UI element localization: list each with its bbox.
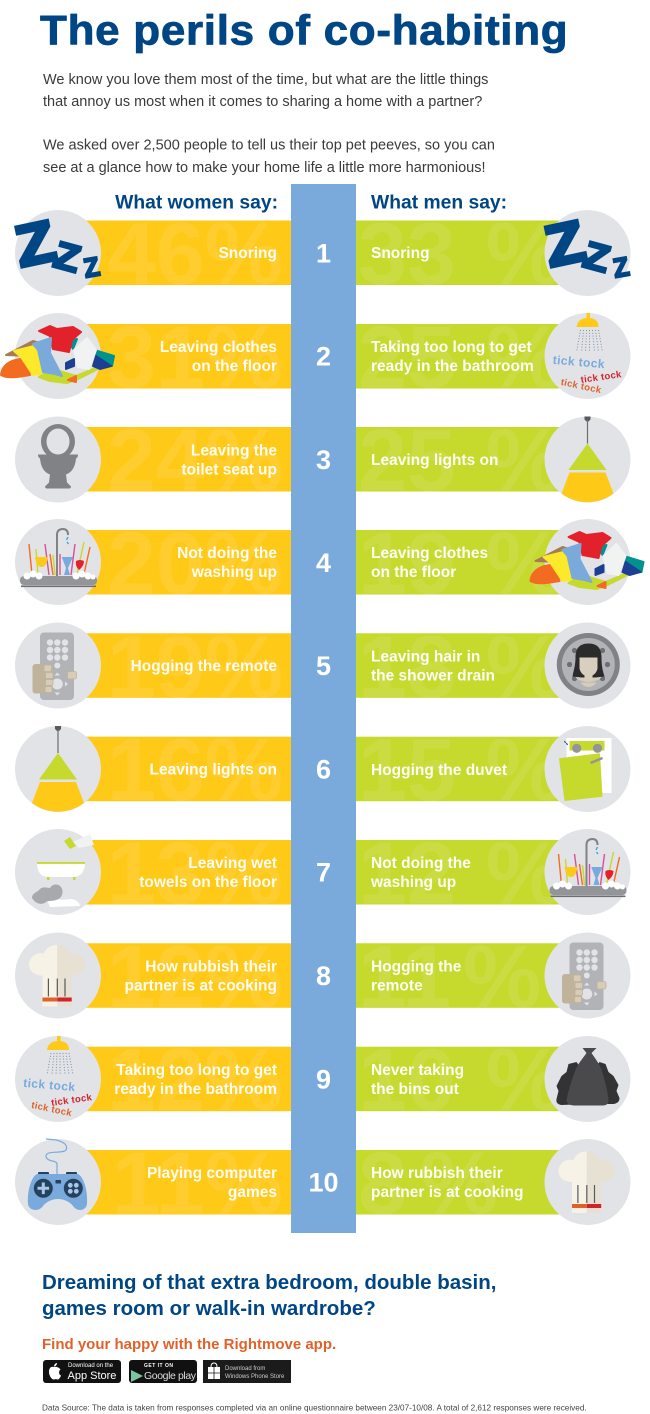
row 9 women: taking too long 12%: ready in the bathroom bbox=[114, 1081, 277, 1098]
heading: what women say: What women say: bbox=[115, 192, 278, 214]
row 10 women: computer games 11%: Playing computer bbox=[147, 1165, 277, 1182]
title: The perils of co-habiting bbox=[40, 8, 568, 54]
icon: shower and tick tock, men: tick tock bbox=[552, 353, 606, 371]
icon: pendant lamp, women bbox=[15, 726, 101, 812]
row 2 women: leaving clothes 31%: on the floor bbox=[192, 358, 277, 375]
central ranking column: 4 bbox=[316, 548, 331, 578]
central ranking column: 1 bbox=[316, 238, 331, 268]
badge: google play: GET IT ON bbox=[144, 1363, 174, 1369]
icon: bin bags, men bbox=[544, 1036, 630, 1122]
icon: sleeping zzz, women: Z bbox=[9, 208, 61, 279]
central ranking column: 7 bbox=[316, 858, 331, 888]
row 8 women: rubbish cooking 12%: partner is at cooking bbox=[125, 978, 277, 994]
central ranking column: 2 bbox=[316, 342, 331, 372]
row 2 men: taking too long 25%: 25 % bbox=[358, 308, 564, 406]
badge: windows phone store: Windows Phone Store bbox=[225, 1374, 285, 1380]
icon: remote, men bbox=[544, 932, 630, 1018]
row 9 men: never taking bins out 10%: Never taking bbox=[371, 1062, 464, 1079]
icon: chef hat, women bbox=[15, 932, 101, 1018]
row 7 men: washing up 12%: Not doing the bbox=[371, 855, 471, 872]
icon: shower and tick tock, women: tick tock bbox=[30, 1100, 73, 1119]
row 4 men: leaving clothes 19%: on the floor bbox=[371, 564, 456, 581]
row 6 men: hogging the duvet 15%: Hogging the duvet bbox=[371, 762, 507, 779]
central ranking column bbox=[291, 184, 356, 1233]
badge: app store: App Store bbox=[68, 1370, 116, 1382]
row 5 women: hogging the remote 19%: 19% bbox=[107, 617, 283, 716]
row 9 women: taking too long 12%: 12% bbox=[107, 1030, 283, 1129]
icon: sleeping zzz, men: Z bbox=[539, 208, 590, 279]
badge: app store bbox=[43, 1360, 121, 1383]
row 4 women: washing up 20%: Not doing the bbox=[177, 545, 277, 562]
icon: sleeping zzz, women bbox=[9, 208, 102, 296]
row 3 men: leaving lights on 25%: 25 % bbox=[358, 410, 564, 510]
icon: remote, women bbox=[15, 622, 101, 708]
central ranking column: 3 bbox=[316, 445, 331, 475]
intro text: We asked over 2,500 people to tell us their top pet peeves, so you can bbox=[43, 138, 495, 154]
row 3 women: toilet seat 24%: 24% bbox=[107, 410, 283, 510]
row 10 women: computer games 11%: 11% bbox=[112, 1134, 283, 1232]
row 10 men: rubbish cooking 8% bbox=[356, 1134, 561, 1232]
row 2 women: leaving clothes 31%: Leaving clothes bbox=[160, 339, 277, 356]
icon: sleeping zzz, men: Z bbox=[579, 234, 614, 281]
row 4 women: washing up 20%: 20% bbox=[107, 514, 283, 612]
central ranking column: 10 bbox=[308, 1168, 339, 1198]
icon: washing up, men bbox=[544, 829, 630, 915]
icon: shower and tick tock, men bbox=[544, 313, 630, 399]
closing question heading: games room or walk-in wardrobe? bbox=[42, 1297, 376, 1320]
closing question heading: Dreaming of that extra bedroom, double basin, bbox=[42, 1271, 496, 1294]
icon: game controller, women bbox=[15, 1139, 101, 1225]
row 1 women: snoring 46%: Snoring bbox=[218, 245, 277, 262]
row 9 women: taking too long 12%: Taking too long to get bbox=[116, 1062, 277, 1079]
central ranking column: 9 bbox=[316, 1064, 331, 1094]
row 4 women: washing up 20%: washing up bbox=[191, 564, 277, 581]
row 10 men: rubbish cooking 8%: 8% bbox=[358, 1134, 498, 1232]
icon: bath and wet towel, women bbox=[15, 829, 101, 915]
row 7 women: wet towels 13%: Leaving wet bbox=[188, 855, 277, 872]
icon: washing up, women bbox=[15, 519, 101, 605]
row 9 men: never taking bins out 10%: 10 % bbox=[358, 1030, 564, 1129]
row 7 men: washing up 12%: 12 % bbox=[358, 824, 564, 922]
row 2 women: leaving clothes 31%: 31% bbox=[107, 308, 283, 406]
row 1 men: snoring 33%: 33 % bbox=[358, 204, 564, 303]
row 8 women: rubbish cooking 12%: How rubbish their bbox=[145, 958, 277, 976]
icon: pendant lamp, men bbox=[544, 416, 630, 502]
row 5 men: hair in drain 18%: 18 % bbox=[358, 617, 564, 716]
icon: sleeping zzz, men bbox=[539, 208, 632, 296]
row 10 women: computer games 11%: games bbox=[228, 1184, 277, 1201]
row 8 women: rubbish cooking 12%: 12% bbox=[107, 927, 283, 1026]
row 8 men: hogging the remote 11%: Hogging the bbox=[371, 958, 462, 976]
icon: shower and tick tock, women bbox=[15, 1036, 101, 1122]
intro text bbox=[43, 72, 495, 176]
row 3 women: toilet seat 24%: Leaving the bbox=[191, 442, 277, 460]
icon: clothes pile, women bbox=[1, 313, 114, 399]
intro text: We know you love them most of the time, but what are the little things bbox=[43, 72, 488, 88]
row 8 men: hogging the remote 11%: 11% bbox=[358, 927, 541, 1026]
badge: windows phone store bbox=[203, 1360, 291, 1383]
badge: google play: Google play bbox=[144, 1370, 197, 1382]
row 9 men: never taking bins out 10%: the bins out bbox=[371, 1081, 459, 1098]
closing question heading bbox=[42, 1271, 496, 1320]
icon: duvet hog, men bbox=[544, 726, 630, 812]
icon: hair in drain, men bbox=[544, 622, 630, 708]
row 10 men: rubbish cooking 8%: How rubbish their bbox=[371, 1165, 503, 1182]
row 7 women: wet towels 13%: 13% bbox=[107, 824, 283, 922]
row 6 women: leaving lights on 16%: Leaving lights on bbox=[150, 762, 277, 778]
badge: app store: Download on the bbox=[68, 1363, 114, 1369]
icon: sleeping zzz, women: Z bbox=[49, 234, 85, 281]
row 3 men: leaving lights on 25%: Leaving lights on bbox=[371, 452, 498, 469]
row 1 women: snoring 46%: 46% bbox=[107, 204, 283, 303]
row 7 men: washing up 12%: washing up bbox=[370, 874, 456, 891]
app call to action: Find your happy with the Rightmove app. bbox=[42, 1336, 336, 1353]
row 6 women: leaving lights on 16%: 16% bbox=[107, 720, 283, 819]
intro text: that annoy us most when it comes to sharing a home with a partner? bbox=[43, 94, 482, 110]
row 5 women: hogging the remote 19%: Hogging the remote bbox=[131, 658, 277, 675]
badge: google play bbox=[129, 1360, 197, 1383]
icon: clothes pile, men bbox=[530, 519, 644, 605]
row 2 men: taking too long 25%: ready in the bathroom bbox=[371, 358, 534, 375]
icon: shower and tick tock, women: tick tock bbox=[50, 1092, 93, 1109]
icon: shower and tick tock, women: tick tock bbox=[23, 1076, 76, 1094]
icon: sleeping zzz, men: Z bbox=[611, 251, 632, 284]
row 5 men: hair in drain 18%: the shower drain bbox=[371, 668, 495, 684]
row 5 men: hair in drain 18%: Leaving hair in bbox=[371, 648, 480, 666]
row 7 women: wet towels 13%: towels on the floor bbox=[139, 874, 277, 891]
row 4 men: leaving clothes 19%: 19 % bbox=[358, 514, 564, 612]
row 8 men: hogging the remote 11%: remote bbox=[371, 978, 423, 994]
icon: sleeping zzz, women: Z bbox=[81, 251, 102, 284]
row 1 men: snoring 33%: Snoring bbox=[371, 245, 430, 262]
badge: windows phone store: Download from bbox=[225, 1366, 265, 1372]
row 4 men: leaving clothes 19%: Leaving clothes bbox=[371, 545, 488, 562]
heading: what men say: What men say: bbox=[371, 192, 507, 214]
data source note: Data Source: The data is taken from responses completed via an online questionnaire between 23/07-10/08. A total of 2,612 responses were received. bbox=[42, 1404, 587, 1412]
row 2 men: taking too long 25%: Taking too long to get bbox=[371, 339, 532, 356]
central ranking column: 5 bbox=[316, 651, 331, 681]
row 10 men: rubbish cooking 8%: partner is at cooking bbox=[371, 1184, 523, 1201]
icon: shower and tick tock, men: tick tock bbox=[560, 377, 603, 396]
row 6 men: hogging the duvet 15%: 15 % bbox=[358, 720, 564, 819]
icon: toilet bbox=[15, 416, 101, 502]
intro text: see at a glance how to make your home life a little more harmonious! bbox=[43, 160, 485, 176]
row 3 women: toilet seat 24%: toilet seat up bbox=[181, 462, 277, 478]
icon: shower and tick tock, men: tick tock bbox=[580, 369, 623, 386]
central ranking column: 8 bbox=[316, 961, 331, 991]
central ranking column: 6 bbox=[316, 754, 331, 784]
icon: chef hat, men bbox=[544, 1139, 630, 1225]
